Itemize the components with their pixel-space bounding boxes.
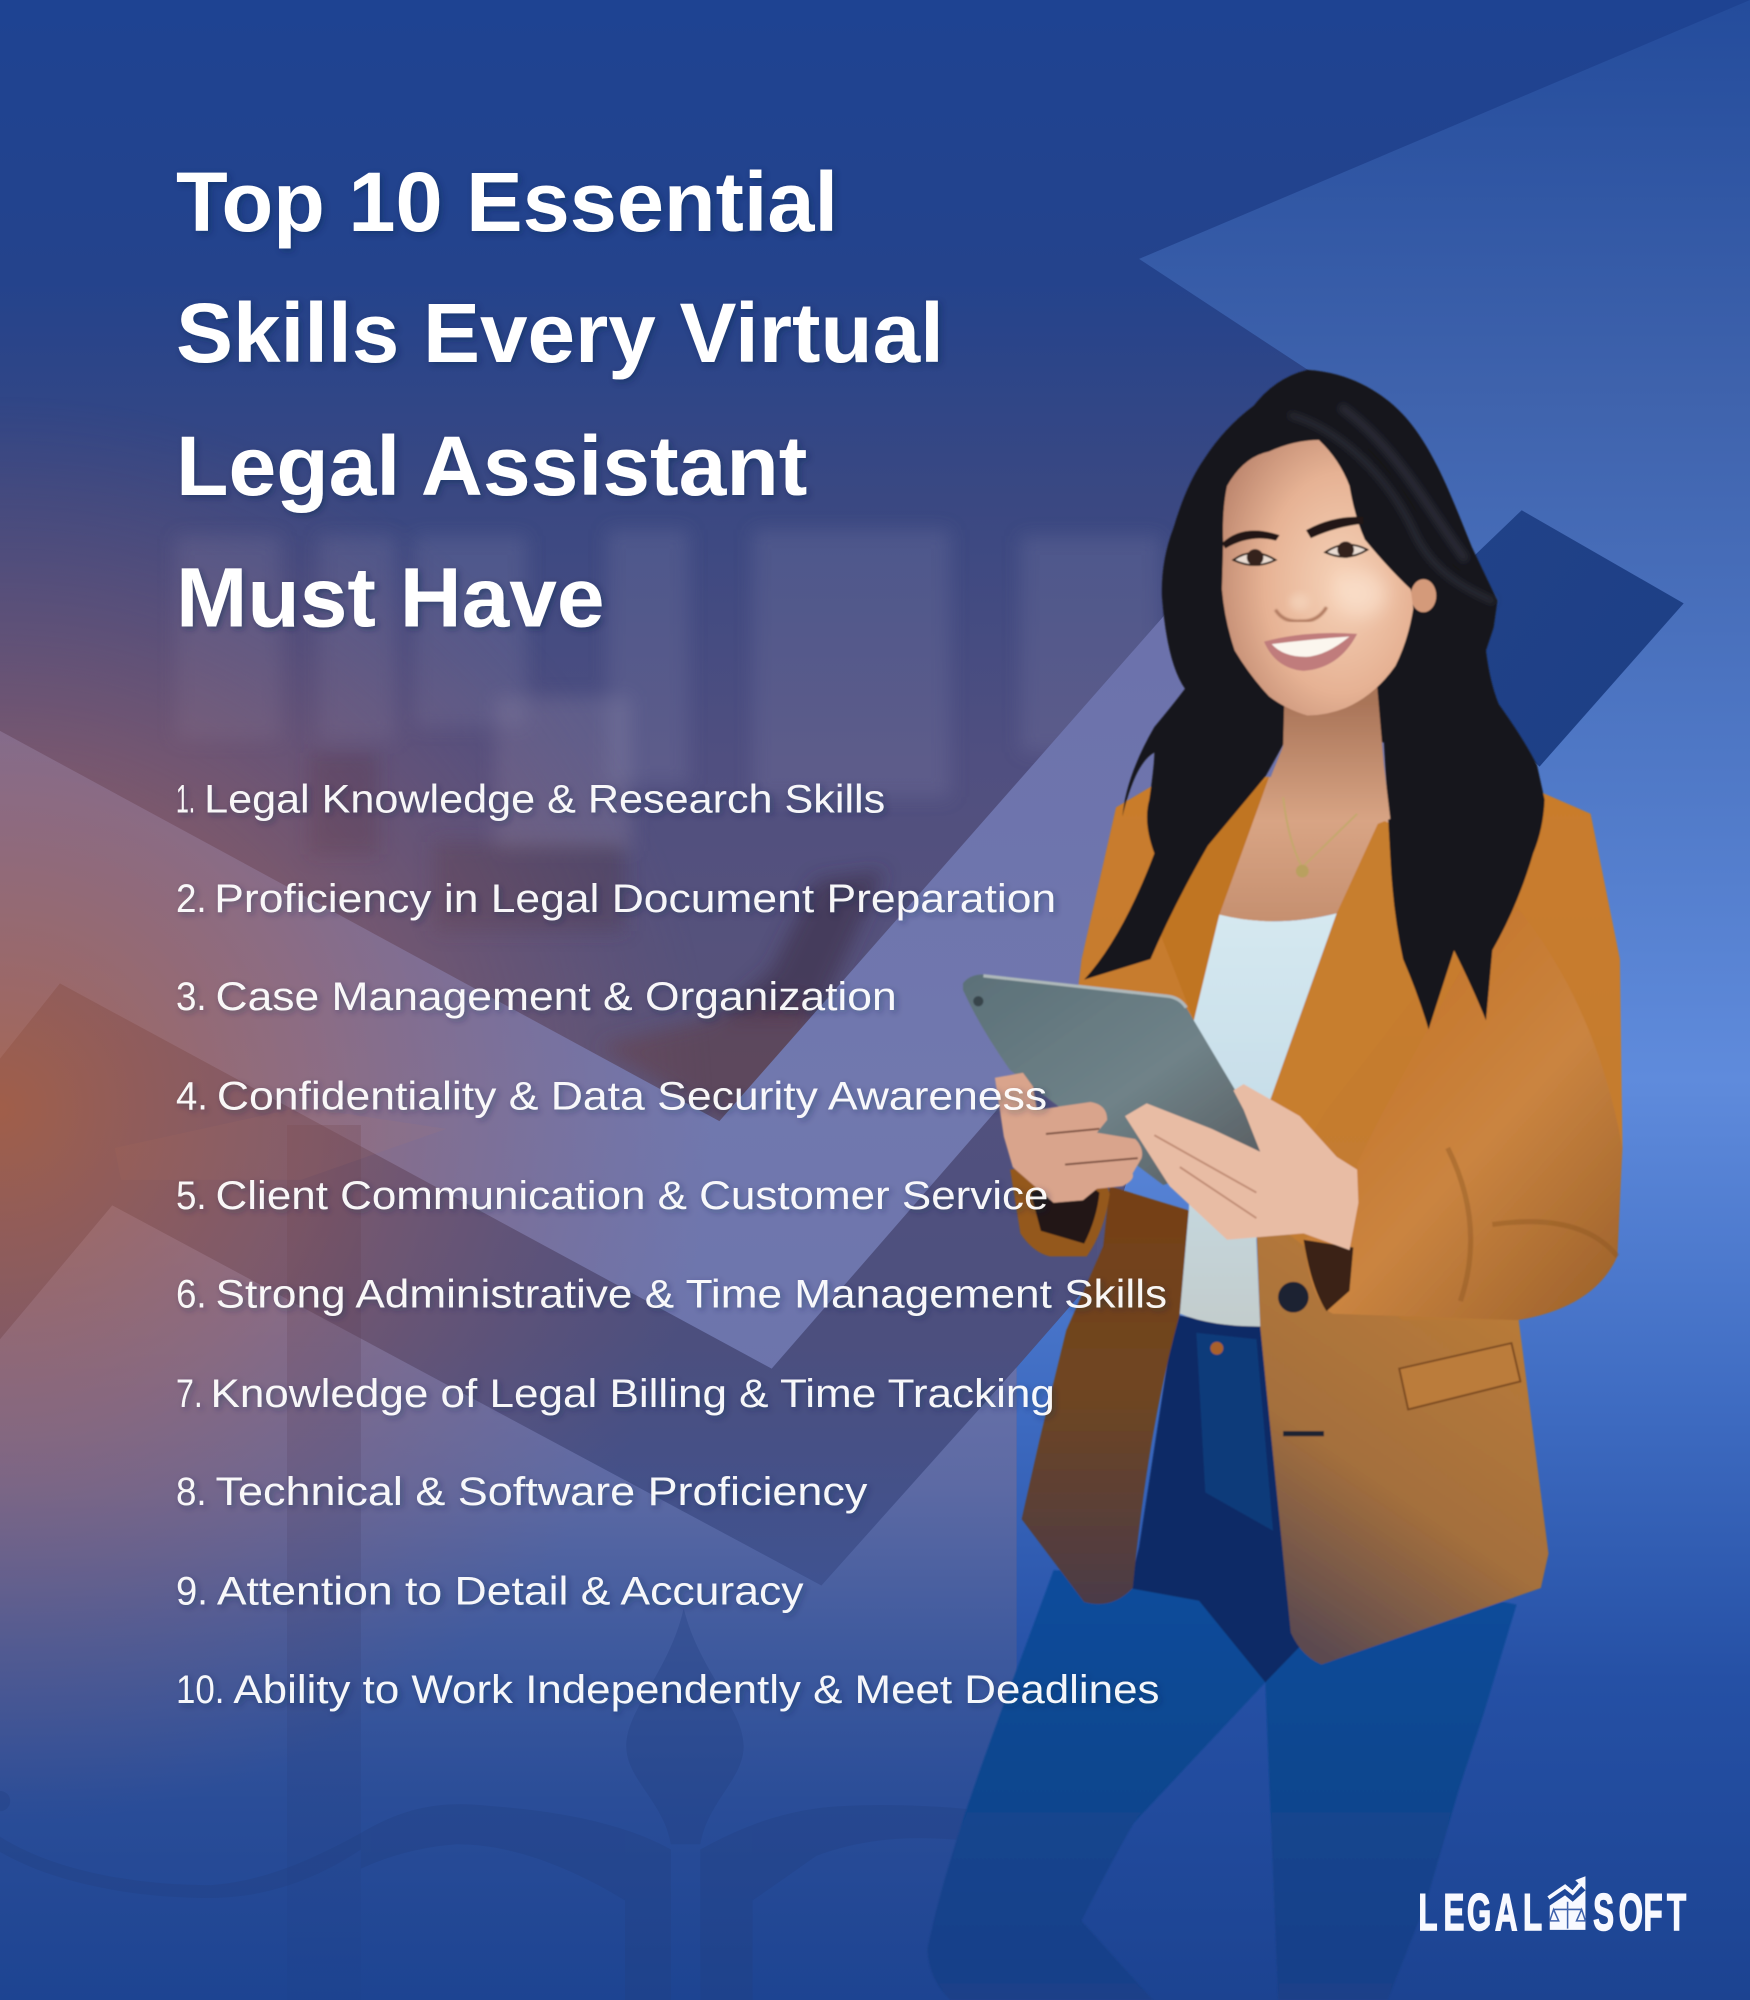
desk pillar silhouette [287, 1125, 361, 2000]
chest [1219, 777, 1393, 921]
skills list: Client Communication & Customer Service [216, 1174, 1048, 1218]
skills list: Case Management & Organization [216, 975, 897, 1019]
background arrow: light arrowhead and right field [1017, 0, 1750, 2000]
skills list: 1. [176, 777, 195, 821]
desk top [115, 1107, 446, 1180]
red tint on the left [0, 383, 791, 1913]
sleeve [1304, 893, 1622, 1320]
person with tablet [927, 370, 1622, 2000]
eyebrows [1223, 518, 1362, 547]
skills list: 8. [176, 1470, 207, 1514]
blazer lapels [1154, 777, 1429, 1224]
blazer seam [1407, 1080, 1426, 1173]
skills list: Ability to Work Independently & Meet Deadlines [233, 1668, 1159, 1712]
smile [1264, 633, 1357, 671]
logo wordmark [1418, 1884, 1686, 1942]
skills list: 4. [176, 1075, 208, 1119]
skills list: Legal Knowledge & Research Skills [204, 777, 885, 821]
background arrow: darker zigzag band [0, 983, 1097, 1585]
right hand [1125, 1084, 1358, 1250]
title: Skills Every Virtual [176, 286, 944, 380]
left cuff [1010, 1154, 1110, 1256]
skills list: 10. [176, 1668, 224, 1712]
skills list: Attention to Detail & Accuracy [217, 1570, 804, 1614]
skills list: Confidentiality & Data Security Awareness [217, 1075, 1047, 1119]
logo wordmark: LEGAL [1418, 1884, 1542, 1942]
skills list: 3. [176, 975, 207, 1019]
skills list: 2. [176, 877, 207, 921]
logo icon: chart and scales [1548, 1876, 1585, 1930]
skills list: 7. [176, 1372, 203, 1416]
ear [1411, 579, 1436, 612]
neck [1269, 676, 1390, 844]
skills list [176, 778, 1167, 1712]
skills list: Knowledge of Legal Billing & Time Tracking [210, 1372, 1055, 1416]
logo wordmark: SOFT [1593, 1884, 1686, 1942]
skills list: 9. [176, 1570, 208, 1614]
title: Must Have [176, 550, 605, 644]
title: Legal Assistant [176, 419, 807, 513]
necklace [1283, 797, 1357, 878]
tablet [963, 974, 1267, 1185]
cheek highlight [1335, 571, 1386, 617]
scales of justice silhouette: nib and book [0, 1608, 989, 2000]
skills list: 5. [176, 1174, 207, 1218]
title [176, 155, 944, 644]
sleeve inner shadow [1304, 1240, 1353, 1311]
skills list: Proficiency in Legal Document Preparation [214, 877, 1056, 921]
blazer button [1278, 1282, 1309, 1312]
blazer right panel [1256, 1110, 1548, 1665]
shirt [1180, 913, 1337, 1327]
blazer upper body [1065, 777, 1622, 1320]
background arrow: lavender zigzag band [0, 536, 1403, 1369]
background arrow: lower zigzag band [0, 1205, 1017, 2000]
hair [1084, 370, 1545, 1029]
skills list: Strong Administrative & Time Management Skills [216, 1272, 1167, 1316]
logo: Legal Soft [1418, 1876, 1686, 1942]
title: Top 10 Essential [176, 155, 838, 249]
nose [1276, 593, 1327, 621]
jeans [927, 1315, 1517, 2000]
skills list: Technical & Software Proficiency [216, 1470, 868, 1514]
blazer left panel [1022, 1186, 1189, 1604]
sleeve buttonhole [1283, 1431, 1324, 1436]
pocket flap [1399, 1343, 1520, 1409]
face [1222, 440, 1413, 716]
blurred office backdrop [176, 529, 1161, 1122]
left hand [995, 1073, 1142, 1203]
background arrow: dark arrow tip [1429, 510, 1684, 767]
eyes [1233, 541, 1367, 566]
skills list: 6. [176, 1272, 207, 1316]
